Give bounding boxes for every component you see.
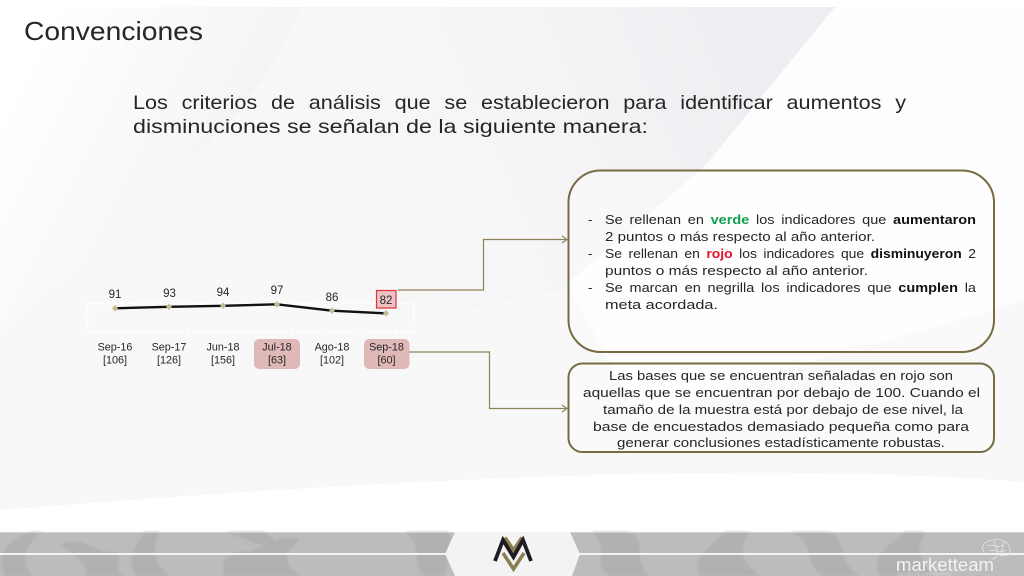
icon: brain outline	[983, 540, 1010, 559]
chart axis labels with bases: Sep-18	[369, 342, 404, 354]
chart axis labels with bases: [106]	[103, 354, 127, 366]
arrow: value to indicator rules	[398, 236, 567, 290]
line chart: indicator trend: 86	[326, 292, 338, 304]
line chart: indicator trend: 93	[163, 288, 176, 300]
line chart: indicator trend: 91	[109, 289, 121, 301]
panel: indicator rules: meta acordada.	[605, 297, 718, 312]
icon: MM logo	[495, 538, 531, 569]
chart axis labels with bases: Jul-18	[262, 342, 292, 354]
panel: indicator rules: Se rellenan en verde los indicadores que aumentaron	[605, 212, 976, 227]
chart axis labels with bases: [126]	[157, 354, 181, 366]
chart axis labels with bases: [60]	[377, 354, 396, 366]
highlighted value 82: 82	[380, 295, 392, 307]
chart axis labels with bases: Jun-18	[206, 342, 240, 354]
marketteam logo	[896, 540, 1010, 576]
intro paragraph	[133, 92, 906, 138]
chart axis labels with bases: [156]	[211, 354, 235, 366]
footer band	[0, 532, 1024, 576]
panel: indicator rules: -	[588, 246, 592, 261]
marketteam logo: marketteam	[896, 555, 994, 575]
arrow: base to sample note	[409, 352, 567, 412]
chart axis labels with bases: Sep-17	[152, 342, 186, 354]
title: Convenciones	[24, 16, 203, 46]
panel: sample size note: base de encuestados demasiado pequeña como para	[593, 419, 970, 434]
panel: indicator rules: puntos o más respecto al año anterior.	[605, 263, 868, 278]
panel: indicator rules: Se rellenan en rojo los indicadores que disminuyeron 2	[605, 246, 976, 261]
intro paragraph: Los criterios de análisis que se establecieron para identificar aumentos y	[133, 92, 906, 114]
chart axis labels with bases: Ago-18	[315, 342, 349, 354]
chart axis labels with bases: [63]	[268, 354, 286, 366]
line chart: indicator trend: 94	[217, 287, 230, 299]
line chart: indicator trend: 97	[271, 285, 283, 297]
panel: indicator rules: Se marcan en negrilla los indicadores que cumplen la	[605, 280, 977, 295]
intro paragraph: disminuciones se señalan de la siguiente manera:	[133, 116, 648, 138]
chart axis labels with bases: [102]	[320, 354, 344, 366]
panel: sample size note: generar conclusiones estadísticamente robustas.	[617, 435, 945, 450]
line chart: indicator trend	[88, 285, 414, 332]
panel: indicator rules: -	[588, 280, 592, 295]
panel: indicator rules: 2 puntos o más respecto al año anterior.	[605, 229, 875, 244]
panel: sample size note: Las bases que se encuentran señaladas en rojo son	[609, 368, 953, 383]
highlighted value 82	[376, 290, 396, 308]
footer centre badge	[445, 532, 580, 576]
panel: sample size note	[568, 364, 994, 452]
panel: indicator rules: -	[588, 212, 592, 227]
panel: sample size note: aquellas que se encuentran por debajo de 100. Cuando el	[583, 385, 980, 400]
chart axis labels with bases: Sep-16	[98, 342, 132, 354]
panel: sample size note: tamaño de la muestra está por debajo de ese nivel, la	[603, 402, 964, 417]
panel: indicator rules	[568, 170, 994, 352]
chart axis labels with bases	[98, 339, 410, 369]
